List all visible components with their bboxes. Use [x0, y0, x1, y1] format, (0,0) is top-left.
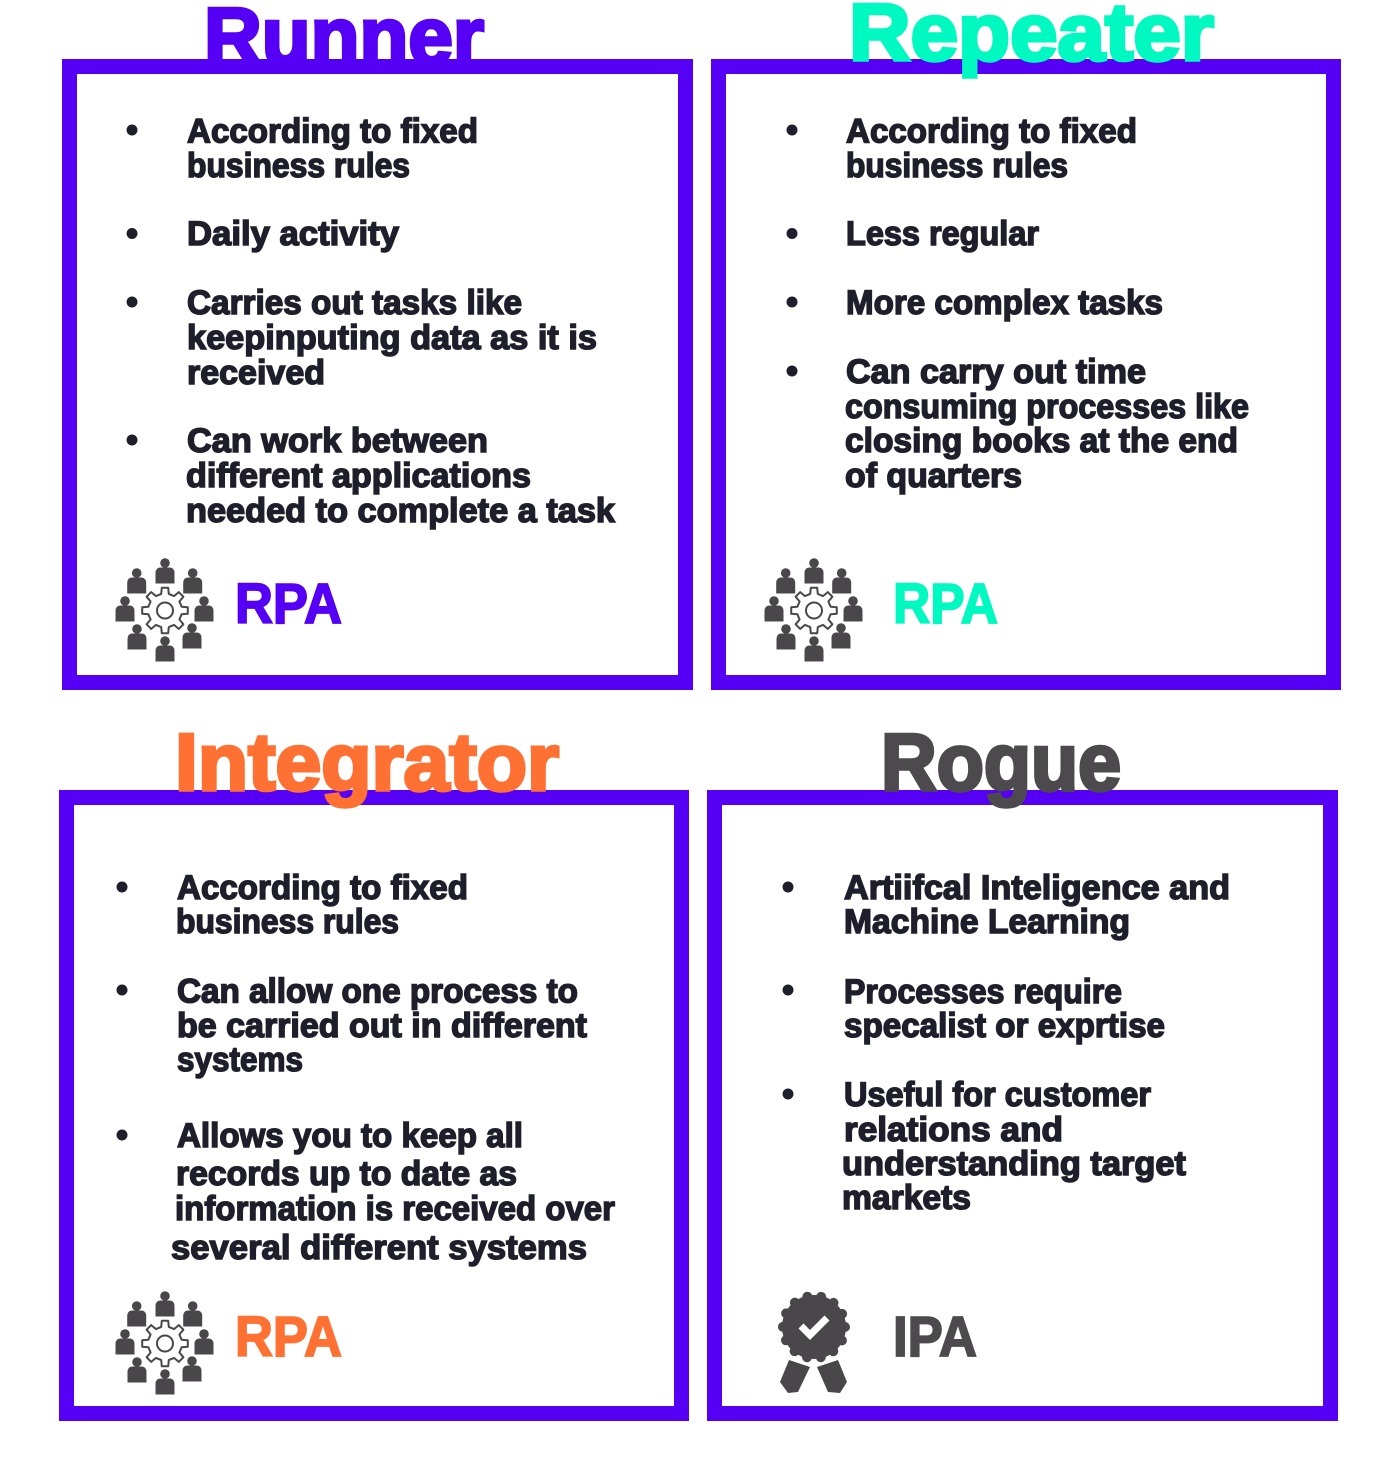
Integrator frame — [66, 798, 682, 1414]
Integrator bullet list: According to fixed — [177, 869, 468, 907]
Runner bullet list: Can work between — [187, 422, 488, 460]
icon: people around gear — [764, 558, 862, 662]
Repeater bullet list: Less regular — [846, 215, 1039, 253]
Runner bullet list — [126, 112, 615, 530]
Rogue bullet list: specalist or exprtise — [844, 1007, 1165, 1045]
Runner bullet list: needed to complete a task — [186, 492, 615, 530]
Repeater bullet list: business rules — [846, 147, 1068, 185]
Integrator bullet list: be carried out in different — [177, 1007, 587, 1045]
RPA label: RPA — [893, 572, 998, 636]
Integrator bullet list: business rules — [176, 903, 399, 941]
Rogue bullet list: understanding target — [842, 1145, 1186, 1183]
panel: Integrator — [66, 718, 682, 1414]
Rogue frame — [714, 798, 1330, 1414]
Repeater frame — [718, 66, 1334, 682]
Integrator heading: Integrator — [175, 718, 559, 808]
Rogue bullet list: Artiifcal Inteligence and — [844, 869, 1230, 907]
Integrator bullet list: systems — [177, 1041, 303, 1079]
Rogue bullet list: Useful for customer — [844, 1076, 1151, 1114]
Rogue bullet list: Processes require — [844, 973, 1122, 1011]
RPA label: RPA — [235, 572, 342, 636]
panel: Runner — [70, 0, 686, 682]
Rogue bullet list: markets — [842, 1179, 971, 1217]
Runner bullet list: Daily activity — [187, 215, 399, 253]
panel: Repeater — [718, 0, 1334, 682]
Integrator bullet list: records up to date as — [176, 1155, 517, 1193]
Rogue bullet list — [782, 869, 1230, 1217]
Repeater bullet list: Can carry out time — [846, 353, 1146, 391]
Integrator bullet list: several different systems — [171, 1229, 587, 1267]
Runner frame — [70, 66, 686, 682]
Repeater bullet list: More complex tasks — [846, 284, 1163, 322]
Runner bullet list: Carries out tasks like — [187, 284, 522, 322]
Runner bullet list: different applications — [186, 457, 531, 495]
Repeater bullet list: consuming processes like — [845, 388, 1249, 426]
icon: people around gear — [116, 558, 214, 662]
Rogue heading: Rogue — [881, 718, 1121, 808]
Runner bullet list: According to fixed — [187, 112, 478, 150]
RPA label: RPA — [235, 1305, 342, 1369]
icon: award badge — [780, 1295, 847, 1393]
Runner bullet list: received — [187, 354, 325, 392]
Repeater bullet list: of quarters — [845, 457, 1022, 495]
Integrator bullet list: Can allow one process to — [177, 972, 578, 1010]
Rogue bullet list: relations and — [844, 1111, 1063, 1149]
Rogue bullet list: Machine Learning — [844, 903, 1130, 941]
Integrator bullet list: information is received over — [175, 1190, 615, 1228]
Repeater bullet list: According to fixed — [846, 112, 1137, 150]
Runner bullet list: keepinputing data as it is — [187, 319, 597, 357]
Integrator bullet list — [116, 869, 615, 1267]
Runner bullet list: business rules — [187, 147, 410, 185]
IPA label: IPA — [893, 1305, 977, 1369]
Repeater bullet list — [786, 112, 1249, 495]
panel: Rogue — [714, 718, 1330, 1414]
Repeater bullet list: closing books at the end — [845, 422, 1238, 460]
Integrator bullet list: Allows you to keep all — [177, 1117, 523, 1155]
icon: people around gear — [116, 1291, 214, 1394]
